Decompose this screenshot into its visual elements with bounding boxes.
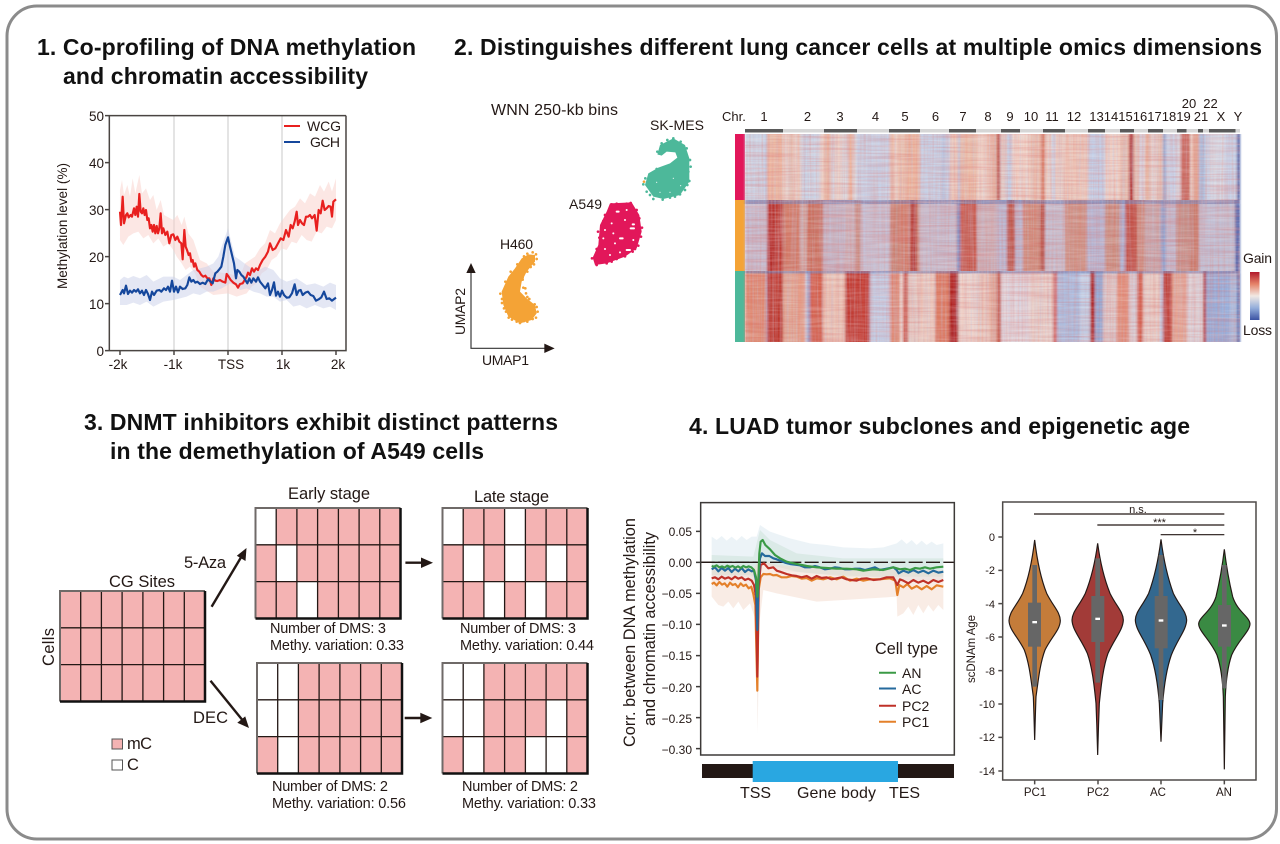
arrows between grids xyxy=(210,548,433,728)
gain/loss colour scale: Loss xyxy=(1243,322,1272,338)
y axis title: scDNAm Age xyxy=(966,615,978,683)
y tick labels: −0.20 xyxy=(662,681,692,695)
chromosome labels: 5 xyxy=(901,109,909,124)
heading: panel 1: and chromatin accessibility xyxy=(63,63,368,89)
heat row: SK-MES xyxy=(745,271,1240,342)
gene model bar: TSS xyxy=(740,785,771,802)
violin: PC1 xyxy=(1009,540,1060,740)
gain/loss colour scale xyxy=(1243,250,1272,338)
y axis tick labels: 50 xyxy=(89,109,104,124)
legend: cell type xyxy=(875,640,938,730)
cluster: A549 xyxy=(592,202,642,265)
x labels: AC xyxy=(1150,787,1166,799)
UMAP scatter plot xyxy=(452,102,704,368)
grid: CG sites xyxy=(60,591,205,702)
cluster: SK-MES xyxy=(643,138,691,200)
diagram labels: Late stage xyxy=(474,488,549,506)
x axis tick labels: 2k xyxy=(331,357,345,372)
chromosome labels: 18 xyxy=(1162,109,1176,124)
y tick labels: -12 xyxy=(979,732,995,744)
annotation: DEC early: Methy. variation: 0.56 xyxy=(272,796,406,812)
chromosome labels: 19 xyxy=(1176,109,1191,124)
y tick labels: -14 xyxy=(979,766,995,778)
x axis tick labels: 1k xyxy=(276,357,290,372)
annotation: DEC early: Number of DMS: 2 xyxy=(272,779,388,795)
cluster labels: UMAP1 xyxy=(482,352,529,368)
cluster labels: A549 xyxy=(569,196,602,212)
y axis title: Methylation level (%) xyxy=(55,163,70,289)
violin plot: scDNAm age xyxy=(966,502,1256,799)
chromosome labels: 15 xyxy=(1118,109,1133,124)
significance labels: n.s. xyxy=(1129,504,1147,516)
diagram labels: Cells xyxy=(40,628,58,666)
x axis tick labels: TSS xyxy=(218,357,244,372)
heatmap: copy number by chromosome xyxy=(722,96,1272,342)
chromosome labels: 16 xyxy=(1133,109,1147,124)
significance brackets xyxy=(1034,514,1224,535)
y axis tick labels: 40 xyxy=(89,156,104,171)
y tick labels: -4 xyxy=(985,599,995,611)
grid: DEC late stage xyxy=(442,663,588,774)
line chart: correlation across gene body xyxy=(621,503,954,802)
grid: DEC early stage xyxy=(257,663,402,774)
line: GCH xyxy=(120,237,336,301)
violin: AN xyxy=(1199,549,1250,769)
legend: mC and C xyxy=(112,735,152,774)
heat row: H460 xyxy=(745,200,1240,271)
chromosome labels: 2 xyxy=(804,109,811,124)
annotation: 5-Aza early: Methy. variation: 0.33 xyxy=(270,638,404,654)
heading: panel 4: 4. LUAD tumor subclones and epigenetic age xyxy=(689,413,1190,439)
legend: WCG and GCH xyxy=(284,118,341,150)
chromosome labels: 9 xyxy=(1006,109,1014,124)
violin: AC xyxy=(1135,539,1187,742)
x axis tick labels: -1k xyxy=(164,357,183,372)
chromosome labels xyxy=(722,96,1243,124)
annotation: DEC late: Methy. variation: 0.33 xyxy=(462,796,596,812)
annotation: DEC early xyxy=(272,779,406,812)
sample colour bar xyxy=(735,134,745,342)
cluster labels: UMAP2 xyxy=(452,288,468,335)
cluster labels: SK-MES xyxy=(650,117,704,133)
y tick labels xyxy=(662,525,692,757)
chromosome labels: 17 xyxy=(1147,109,1162,124)
chromosome bar xyxy=(745,129,1240,132)
heading: panel 3: in the demethylation of A549 cells xyxy=(110,438,484,464)
UMAP axes arrows xyxy=(466,263,555,353)
chromosome labels: 8 xyxy=(984,109,992,124)
chromosome labels: 14 xyxy=(1104,109,1118,124)
heading: panel 2: 2. Distinguishes different lung cancer cells at multiple omics dimensions xyxy=(454,34,1262,60)
line: AN xyxy=(712,540,943,597)
cluster labels xyxy=(452,117,704,368)
x labels xyxy=(1024,787,1232,799)
y axis tick labels: 10 xyxy=(89,297,104,312)
y tick labels: 0.05 xyxy=(669,525,692,539)
chromosome labels: 1 xyxy=(760,109,768,124)
y tick labels: 0 xyxy=(989,532,995,544)
y tick labels: -2 xyxy=(985,565,995,577)
y tick labels: −0.05 xyxy=(662,587,692,601)
diagram labels: 5-Aza xyxy=(184,554,227,572)
x labels: AN xyxy=(1216,787,1232,799)
y tick labels: −0.25 xyxy=(662,712,692,726)
band: GCH confidence xyxy=(120,228,336,310)
diagram labels: Early stage xyxy=(288,485,370,503)
chromosome labels: X xyxy=(1217,109,1226,124)
diagram labels: DEC xyxy=(193,709,228,727)
annotation: 5-Aza late: Methy. variation: 0.44 xyxy=(460,638,594,654)
diagram: DNMT inhibitor demethylation xyxy=(40,485,596,812)
chromosome labels: 7 xyxy=(959,109,967,124)
cluster labels: H460 xyxy=(500,236,533,252)
legend: cell type: AN xyxy=(902,665,921,681)
legend: cell type: AC xyxy=(902,681,921,697)
y tick labels xyxy=(979,532,995,778)
line chart: methylation level around TSS xyxy=(55,109,346,372)
y axis tick labels: 0 xyxy=(96,344,104,359)
y tick labels: -6 xyxy=(985,632,995,644)
gene model bar: TES xyxy=(889,785,920,802)
y axis title: and chromatin accessibility xyxy=(641,531,659,726)
band: WCG confidence xyxy=(120,175,336,297)
violin: PC2 xyxy=(1072,543,1123,755)
UMAP scatter plot: WNN 250-kb bins xyxy=(491,102,618,119)
annotation: 5-Aza late: Number of DMS: 3 xyxy=(460,621,576,637)
chromosome labels: 11 xyxy=(1045,109,1059,124)
x labels: PC1 xyxy=(1024,787,1046,799)
legend: WCG and GCH: WCG xyxy=(307,118,341,134)
annotation: 5-Aza early xyxy=(270,621,404,654)
y axis tick labels: 30 xyxy=(89,203,104,218)
line: PC1 xyxy=(712,574,943,691)
gain/loss colour scale: Gain xyxy=(1243,250,1272,266)
heading: panel 3: 3. DNMT inhibitors exhibit distinct patterns xyxy=(84,409,558,435)
y tick labels: -10 xyxy=(979,699,995,711)
y tick labels: −0.30 xyxy=(662,743,692,757)
y tick labels: 0.00 xyxy=(669,556,692,570)
y tick labels: −0.15 xyxy=(662,649,692,663)
significance labels: * xyxy=(1193,527,1198,539)
chromosome labels: 20 xyxy=(1182,96,1196,111)
legend: mC and C: C xyxy=(127,756,139,774)
chromosome labels: 13 xyxy=(1089,109,1104,124)
diagram labels: CG Sites xyxy=(109,573,175,591)
y tick labels: −0.10 xyxy=(662,618,692,632)
line: WCG xyxy=(120,194,336,288)
y axis title: Corr. between DNA methylation xyxy=(621,518,639,747)
heat row: A549 xyxy=(745,134,1240,200)
chromosome labels: 22 xyxy=(1203,96,1218,111)
line: AC xyxy=(712,553,943,630)
heatmap texture xyxy=(745,134,1240,342)
x axis tick labels: -2k xyxy=(109,357,128,372)
significance labels xyxy=(1129,504,1198,539)
y axis tick labels xyxy=(89,109,104,359)
legend: cell type: PC1 xyxy=(902,714,929,730)
annotation: DEC late xyxy=(462,779,596,812)
y axis tick labels: 20 xyxy=(89,250,104,265)
y axis title xyxy=(621,518,659,747)
legend: cell type: PC2 xyxy=(902,698,929,714)
legend: cell type: Cell type xyxy=(875,640,938,658)
chromosome labels: Y xyxy=(1234,109,1243,124)
legend: WCG and GCH: GCH xyxy=(310,134,340,150)
chromosome labels: 4 xyxy=(872,109,879,124)
diagram labels xyxy=(40,485,549,727)
annotation: 5-Aza early: Number of DMS: 3 xyxy=(270,621,386,637)
heading: panel 1: 1. Co-profiling of DNA methylation xyxy=(37,34,416,60)
annotation: DEC late: Number of DMS: 2 xyxy=(462,779,578,795)
chromosome labels: Chr. xyxy=(722,109,746,124)
y tick labels: -8 xyxy=(985,666,995,678)
chromosome labels: 6 xyxy=(932,109,939,124)
gene model bar: Gene body xyxy=(797,785,876,802)
chromosome labels: 10 xyxy=(1024,109,1038,124)
gene model bar xyxy=(702,761,954,802)
grid: 5-Aza late stage xyxy=(442,508,588,618)
heading: panel 3 xyxy=(84,409,558,464)
x axis tick labels xyxy=(109,357,345,372)
confidence bands xyxy=(712,525,943,733)
line: PC2 xyxy=(712,563,943,677)
grid: 5-Aza early stage xyxy=(256,508,400,618)
legend: mC and C: mC xyxy=(127,735,152,753)
chromosome labels: 3 xyxy=(836,109,844,124)
x labels: PC2 xyxy=(1087,787,1109,799)
cluster: H460 xyxy=(500,252,538,323)
chromosome labels: 21 xyxy=(1194,109,1208,124)
heading: panel 1 xyxy=(37,34,416,89)
annotation: 5-Aza late xyxy=(460,621,594,654)
significance labels: *** xyxy=(1153,517,1167,529)
chromosome labels: 12 xyxy=(1067,109,1081,124)
